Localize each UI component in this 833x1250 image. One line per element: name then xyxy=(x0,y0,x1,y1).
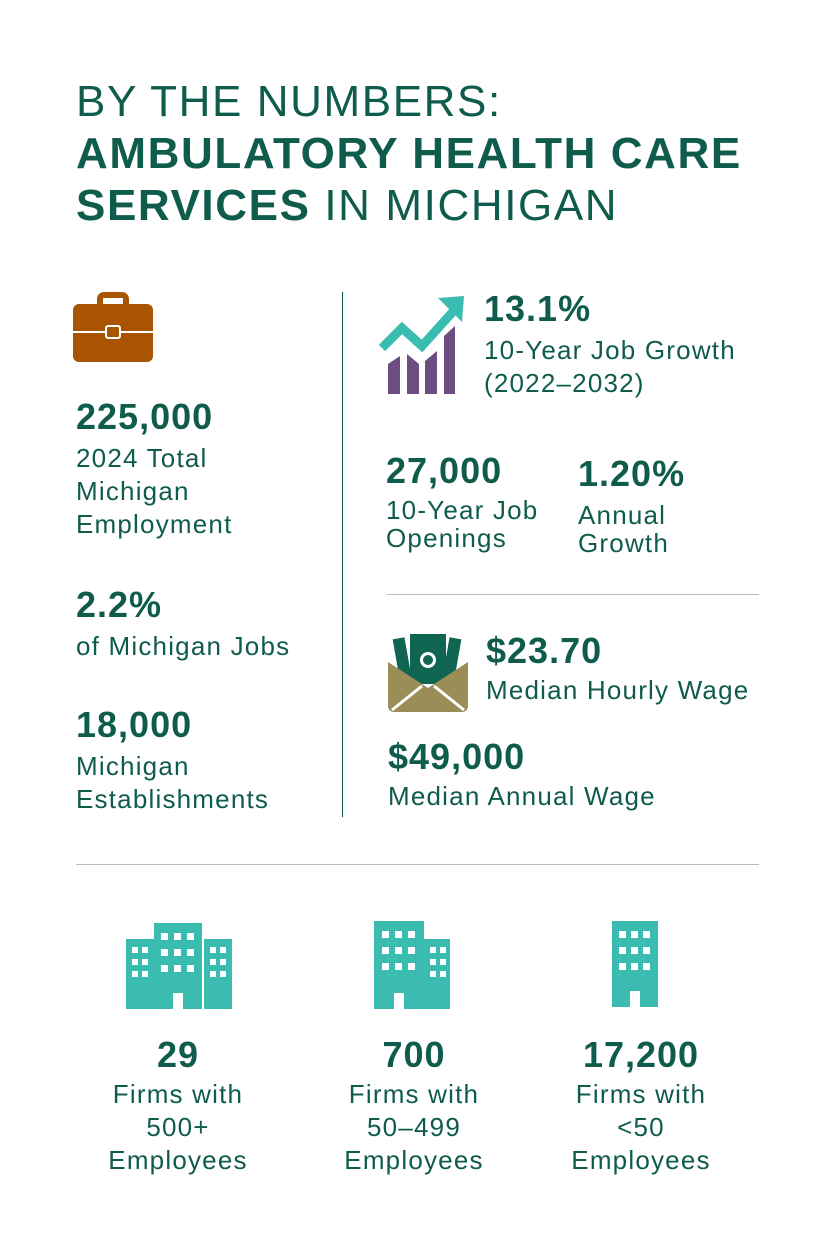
stat: job growth: (2022–2032) xyxy=(484,368,645,398)
stat: firms under 50: Employees xyxy=(571,1145,711,1175)
stat: establishments: 18,000 xyxy=(76,704,192,745)
stat: establishments: Michigan xyxy=(76,751,190,781)
icon: large building group xyxy=(126,923,232,1009)
divider xyxy=(387,594,759,595)
icon: medium building group xyxy=(374,921,450,1009)
icon: money envelope xyxy=(388,634,468,712)
stat: firms 500+: Firms with xyxy=(113,1079,243,1109)
title: BY THE NUMBERS: xyxy=(76,77,502,126)
stat: hourly wage: Median Hourly Wage xyxy=(486,675,749,705)
stat: firms under 50: <50 xyxy=(617,1112,665,1142)
icon: growth chart xyxy=(378,296,464,394)
stat: annual growth: Growth xyxy=(578,528,669,558)
stat: employment xyxy=(76,396,232,539)
stat: annual wage: Median Annual Wage xyxy=(388,781,656,811)
stat: job openings: Openings xyxy=(386,523,507,553)
stat: firms 50-499: Employees xyxy=(344,1145,484,1175)
divider vertical xyxy=(342,292,343,817)
stat: firms 50-499: 50–499 xyxy=(367,1112,461,1142)
title xyxy=(76,77,742,230)
icon: small building xyxy=(612,921,658,1007)
title: SERVICES IN MICHIGAN xyxy=(76,181,618,230)
title: AMBULATORY HEALTH CARE xyxy=(76,129,742,178)
stat: share of jobs: of Michigan Jobs xyxy=(76,631,290,661)
stat: firms 50-499 xyxy=(344,1034,484,1175)
stat: firms under 50: 17,200 xyxy=(583,1034,699,1075)
stat: firms 500+: Employees xyxy=(108,1145,248,1175)
stat: annual wage xyxy=(388,736,656,811)
stat: job growth: 13.1% xyxy=(484,288,591,329)
stat: firms under 50: Firms with xyxy=(576,1079,706,1109)
stat: firms 500+: 29 xyxy=(157,1034,199,1075)
stat: firms 500+ xyxy=(108,1034,248,1175)
stat: hourly wage xyxy=(486,630,749,705)
stat: establishments: Establishments xyxy=(76,784,269,814)
stat: share of jobs xyxy=(76,584,290,661)
stat: employment: Michigan xyxy=(76,476,190,506)
stat: firms under 50 xyxy=(571,1034,711,1175)
stat: annual wage: $49,000 xyxy=(388,736,525,777)
divider xyxy=(76,864,759,865)
stat: firms 50-499: Firms with xyxy=(349,1079,479,1109)
stat: share of jobs: 2.2% xyxy=(76,584,162,625)
stat: job openings: 27,000 xyxy=(386,450,502,491)
stat: firms 50-499: 700 xyxy=(382,1034,446,1075)
stat: job growth: 10-Year Job Growth xyxy=(484,335,736,365)
stat: annual growth: Annual xyxy=(578,500,666,530)
stat: job openings xyxy=(386,450,538,553)
stat: employment: 225,000 xyxy=(76,396,213,437)
stat: annual growth: 1.20% xyxy=(578,453,685,494)
stat: establishments xyxy=(76,704,269,814)
stat: job growth xyxy=(484,288,736,398)
icon: briefcase xyxy=(73,292,153,362)
stat: firms 500+: 500+ xyxy=(146,1112,210,1142)
stat: employment: Employment xyxy=(76,509,232,539)
stat: employment: 2024 Total xyxy=(76,443,208,473)
stat: annual growth xyxy=(578,453,685,558)
stat: hourly wage: $23.70 xyxy=(486,630,602,671)
stat: job openings: 10-Year Job xyxy=(386,495,538,525)
